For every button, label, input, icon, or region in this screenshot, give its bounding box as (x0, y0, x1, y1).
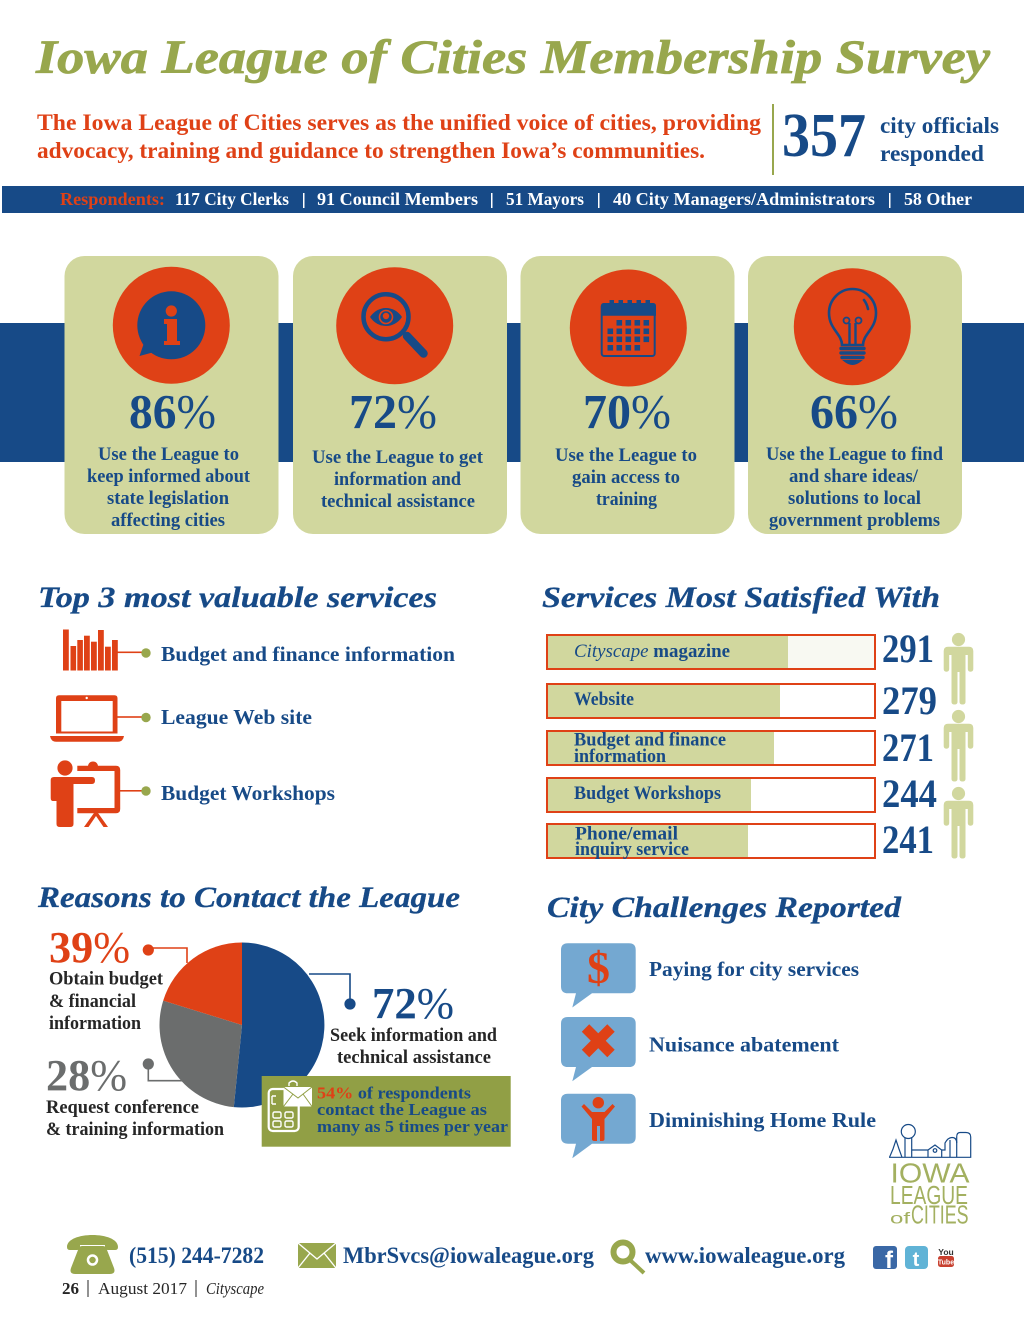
callout: 39% budget: information (49, 1014, 142, 1034)
card description: keep informed about (87, 467, 251, 487)
blue band behind cards (0, 323, 1024, 462)
card description (766, 445, 944, 531)
bar: Website 279 (547, 678, 937, 723)
card description: solutions to local (788, 489, 921, 509)
logo wordmark: of (890, 1210, 911, 1227)
respondents band: Respondents: (60, 189, 165, 209)
bar: Cityscape magazine 291: Cityscape magazine (574, 642, 730, 662)
respondents band: 58 Other (904, 189, 972, 209)
page footer line: 26 (62, 1279, 79, 1298)
icon: envelope (298, 1243, 336, 1268)
list: city challenges (561, 942, 876, 1158)
page footer line: August 2017 (98, 1279, 187, 1298)
bar: Cityscape magazine 291: 291 (882, 626, 934, 671)
bar: Website 279: 279 (882, 678, 937, 723)
footer: website: www.iowaleague.org (645, 1243, 845, 1268)
callout: 28% conference: & training information (46, 1120, 225, 1140)
bar: Budget and finance information 271: 271 (882, 725, 934, 770)
intro text: advocacy, training and guidance to strengthen Iowa’s communities. (37, 138, 705, 164)
stat: 357 city officials responded (782, 102, 999, 170)
icon: speech bubble dollar: $ (587, 942, 610, 993)
callout text: 54% of respondents (317, 1084, 471, 1102)
callout: 28% conference: Request conference (46, 1098, 199, 1118)
icon: bar chart (63, 630, 151, 670)
page footer line (62, 1279, 264, 1298)
card description (87, 445, 251, 531)
logo: Iowa League of Cities (889, 1124, 971, 1229)
icon: speech bubble X (561, 1017, 636, 1081)
icon: youtube: Tube (938, 1260, 954, 1266)
card description: state legislation (107, 489, 230, 509)
chart: satisfaction bars (547, 626, 973, 862)
label: budget workshops: Budget Workshops (161, 781, 335, 805)
card description: training (596, 490, 658, 510)
logo wordmark: CITIES (911, 1199, 968, 1229)
logo wordmark: IOWA (890, 1157, 970, 1188)
callout: 28% conference (46, 1051, 225, 1140)
bar: Budget and finance information 271: information (574, 747, 667, 767)
bar: Budget Workshops 244: Budget Workshops (574, 784, 721, 804)
respondents band: 51 Mayors (506, 189, 584, 209)
respondents band (2, 186, 1024, 213)
chart: reasons pie (160, 942, 324, 1107)
footer: phone (67, 1235, 264, 1274)
icon: facebook: f (885, 1247, 894, 1274)
icon: presenter at board (51, 760, 151, 827)
icon: twitter: t (913, 1249, 920, 1271)
callout text: many as 5 times per year (317, 1117, 508, 1136)
icon: info speech bubble (137, 291, 205, 359)
card description (555, 446, 697, 510)
callout: 39% budget (49, 923, 187, 1034)
bar: Budget Workshops 244 (547, 771, 937, 816)
panel: card 66% (748, 256, 962, 534)
stat 72%: 72% (349, 384, 437, 439)
callout: 39% budget: & financial (49, 992, 136, 1012)
divider line (772, 104, 774, 175)
icon: magnifier (614, 1242, 644, 1273)
stat: 357 city officials responded: 357 (782, 102, 866, 170)
callout: 72% technical assistance: 72% (372, 979, 454, 1028)
callout box: 54% of respondents (262, 1076, 511, 1147)
stat: 357 city officials responded: responded (880, 141, 984, 166)
icon: phone and envelope (269, 1081, 312, 1131)
icon: speech bubble person (561, 1094, 636, 1158)
intro text (37, 110, 761, 164)
card description: Use the League to get (312, 448, 484, 468)
label: budget and finance: Budget and finance information (161, 642, 455, 666)
stat: 357 city officials responded: city officials (880, 113, 999, 138)
stat 86%: 86% (129, 384, 216, 439)
panel: card 70% (520, 256, 734, 534)
respondents band: 117 City Clerks (175, 189, 289, 209)
callout: 28% conference: 28% (46, 1051, 127, 1100)
panel: card 72% (293, 256, 507, 534)
heading: top 3 services: Top 3 most valuable services (38, 581, 437, 614)
icon: speech bubble dollar (561, 942, 636, 1008)
icon: youtube (938, 1247, 954, 1267)
stat 66%: 66% (810, 384, 898, 439)
label: nuisance abatement: Nuisance abatement (649, 1032, 840, 1056)
bar: Phone/email inquiry service 241: 241 (882, 817, 934, 862)
card description: Use the League to (555, 446, 697, 466)
callout: 39% budget: 39% (49, 923, 130, 972)
icon: telephone (67, 1235, 118, 1274)
card description: gain access to (572, 468, 680, 488)
callout: 72% technical assistance: technical assistance (337, 1048, 491, 1068)
page footer line: Cityscape (206, 1279, 264, 1298)
bar: Phone/email inquiry service 241: Phone/email (575, 824, 678, 844)
footer: phone: (515) 244-7282 (129, 1243, 264, 1268)
heading: reasons to contact: Reasons to Contact the League (37, 881, 460, 914)
callout: 72% technical assistance (309, 974, 498, 1068)
panel: card 86% (64, 256, 278, 534)
icon: person figures (944, 633, 973, 858)
callout text: contact the League as (317, 1100, 487, 1119)
icon: light bulb (829, 289, 876, 364)
card description (312, 448, 484, 512)
icon: magnifier with eye (364, 294, 424, 354)
bar: Cityscape magazine 291 (547, 626, 934, 671)
logo skyline (889, 1124, 971, 1157)
icon: calendar (601, 300, 656, 356)
icon: laptop (50, 695, 151, 742)
card description: government problems (769, 511, 940, 531)
icons: social media (873, 1246, 954, 1274)
callout text (317, 1084, 508, 1136)
callout: 39% budget: Obtain budget (49, 970, 164, 990)
footer: email: MbrSvcs@iowaleague.org (343, 1243, 594, 1269)
card description: Use the League to find (766, 445, 944, 465)
label: paying for city services: Paying for city services (649, 957, 859, 981)
label: league web site: League Web site (161, 705, 312, 729)
bar: Budget and finance information 271 (547, 725, 934, 770)
respondents band: 40 City Managers/Administrators (613, 189, 875, 209)
heading: most satisfied: Services Most Satisfied With (542, 581, 940, 614)
logo wordmark: LEAGUE (890, 1180, 968, 1210)
card description: and share ideas/ (789, 467, 919, 487)
callout: 72% technical assistance: Seek information and (330, 1026, 498, 1046)
intro text: The Iowa League of Cities serves as the unified voice of cities, providing (37, 110, 761, 136)
stat 70%: 70% (583, 384, 671, 439)
card description: Use the League to (98, 445, 239, 465)
logo wordmark (890, 1157, 970, 1229)
bar: Phone/email inquiry service 241: inquiry service (575, 840, 689, 860)
list: top 3 services (50, 630, 455, 827)
label: diminishing home rule: Diminishing Home Rule (649, 1108, 876, 1132)
bar: Phone/email inquiry service 241 (547, 817, 934, 862)
respondents band: 91 Council Members (317, 189, 478, 209)
card description: information and (334, 470, 462, 490)
title: Iowa League of Cities Membership Survey (35, 31, 991, 84)
bar: Budget Workshops 244: 244 (882, 771, 937, 816)
card description: technical assistance (321, 492, 475, 512)
icon: youtube: You (938, 1247, 954, 1257)
heading: city challenges: City Challenges Reported (547, 891, 902, 924)
bar: Website 279: Website (574, 690, 634, 710)
bar: Budget and finance information 271: Budget and finance (574, 730, 726, 750)
card description: affecting cities (111, 511, 225, 531)
